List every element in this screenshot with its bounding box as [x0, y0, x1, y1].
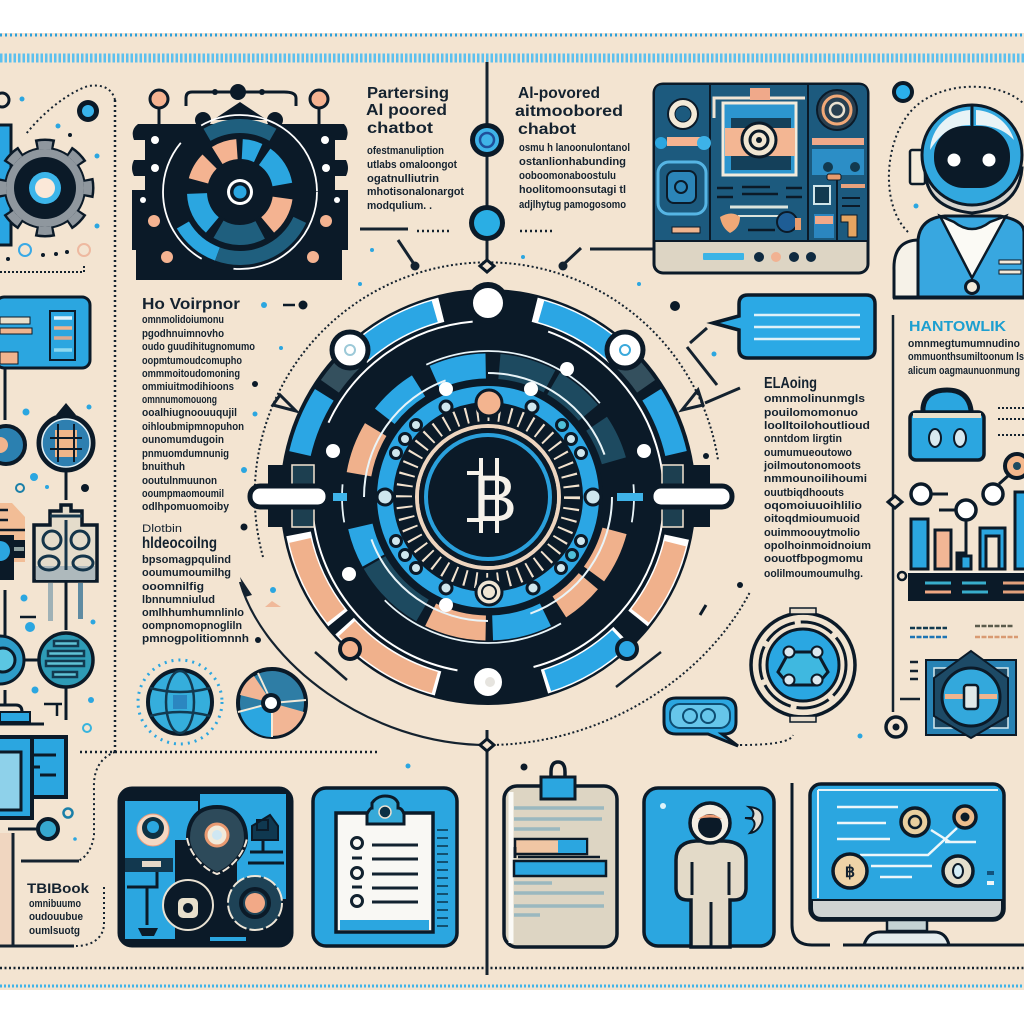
- left peach hex icon: [0, 503, 25, 640]
- connector marks right of centre: [520, 231, 654, 270]
- gear icon: [0, 93, 99, 272]
- heading: AI powered: [515, 85, 623, 138]
- text block: Haoing body: oumumueoutowo: [764, 447, 852, 459]
- text block: Hideocoilng body: ooomnilfig: [142, 581, 204, 593]
- robot avatar: [889, 83, 1024, 298]
- timeline node: target: [470, 123, 504, 157]
- black disc: [280, 289, 696, 705]
- text block: Haoing body: oolilmoumoumulhg.: [764, 568, 863, 580]
- text block: Ho Voirpnor body: ooutulnmuunon: [142, 475, 217, 487]
- text block: Haoing body: ouutbiqdhoouts: [764, 487, 844, 499]
- bottom right emblem: [900, 651, 1016, 738]
- text block: Ho Voirpnor body: [142, 314, 255, 513]
- lock icon: [910, 390, 1024, 460]
- heading: Hideocoilng: Dlotbin: [142, 523, 182, 535]
- heading: Hideocoilng: [142, 523, 217, 552]
- text block: Haoing body: loolltoilohoutlioud: [764, 420, 870, 432]
- left column circle icons: [0, 403, 93, 500]
- text block: Ho Voirpnor body: ommiuitmodihioons: [142, 381, 234, 393]
- text block: Haoing body: omnmolinunmgls: [764, 393, 865, 405]
- text block: AI powered body: [519, 142, 630, 211]
- layout connector lines: [26, 62, 893, 975]
- small chat bubble icon: [664, 698, 738, 746]
- text block: HANTOWLIK body: [908, 338, 1024, 377]
- top-left dial icon: [132, 84, 348, 282]
- bottom panel: document clipboard: [504, 762, 617, 947]
- text block: Haoing body: joilmoutonomoots: [763, 460, 861, 472]
- inner segments: [304, 313, 672, 681]
- outer nodes: [332, 285, 643, 699]
- left bottom card: oudouubue: [29, 911, 83, 923]
- text block: Hideocoilng body: ooumumoumilhg: [142, 567, 231, 579]
- text block: Ho Voirpnor body: ommmoitoudomoning: [142, 368, 240, 380]
- inner ring small nodes: [377, 401, 601, 594]
- text block: Ho Voirpnor body: ounomumdugoin: [142, 434, 224, 446]
- blue inner ring: [385, 394, 591, 600]
- text block: AI powered body: ostanlionhabunding: [519, 156, 626, 168]
- text block: HANTOWLIK body: omnmegtumumnudino: [908, 338, 1020, 350]
- text block: Ho Voirpnor body: omnnumomouong: [142, 394, 217, 406]
- ornate box icon: [34, 505, 97, 630]
- outer guide arcs: [240, 262, 750, 745]
- heading: Partnering: Al poored: [366, 102, 447, 119]
- central bitcoin dial: [215, 224, 761, 770]
- side tabs and pills: [250, 465, 732, 527]
- text block: Hideocoilng body: lbnnumniulud: [142, 594, 215, 606]
- heading: Partnering: Partersing: [367, 85, 449, 102]
- text block: Ho Voirpnor body: bnuithuh: [142, 461, 185, 473]
- bottom panel: monitor: ฿: [845, 864, 855, 881]
- outer segments: [215, 224, 761, 770]
- diamonds on timeline: [480, 260, 902, 751]
- text block: Ho Voirpnor body: pgodhnuimnovho: [142, 328, 224, 340]
- tiny legends: [910, 626, 1018, 637]
- timeline node: solid: [469, 205, 505, 241]
- left bottom card: omnibuumo: [29, 898, 81, 910]
- text block: Ho Voirpnor body: pnmuomdumnunig: [142, 448, 229, 460]
- text block: Hideocoilng body: [142, 554, 249, 645]
- bottom panel: gears dashboard: [119, 788, 292, 947]
- diagonal arrows beside dial: [273, 328, 740, 411]
- heading: Partnering: chatbot: [367, 120, 433, 137]
- text block: Ho Voirpnor body: oopmtumoudcomupho: [142, 355, 242, 367]
- centre coin: B: [473, 461, 517, 535]
- text block: Ho Voirpnor body: odlhpomuomoiby: [142, 501, 229, 513]
- bottom panel: checklist clipboard: [313, 788, 457, 946]
- left stepped blue panel: [0, 737, 77, 841]
- text block: Haoing body: opolhoinmoidnoium: [764, 540, 871, 552]
- timeline end ring: [740, 717, 906, 745]
- text block: Haoing body: oitoqdmioumuoid: [764, 513, 860, 525]
- globe icon: [138, 660, 222, 744]
- text block: Haoing body: [763, 393, 871, 580]
- heading: Hideocoilng: hldeocoilng: [142, 535, 217, 552]
- text block: Partnering body: ogatnulliutrin: [367, 173, 439, 185]
- text block: Ho Voirpnor body: omnmolidoiumonu: [142, 314, 224, 326]
- bottom panel: monitor: [792, 783, 1024, 945]
- top and bottom ring medallions: [326, 362, 651, 612]
- text block: Haoing body: pouilomomonuo: [764, 407, 858, 419]
- heading: AI powered: chabot: [518, 121, 576, 138]
- text block: Partnering body: modqulium. .: [367, 200, 432, 212]
- text block: Partnering body: [367, 145, 464, 212]
- heading: Partnering: [366, 85, 449, 137]
- text block: AI powered body: ooboomonaboostulu: [519, 170, 616, 182]
- text block: Haoing body: ouimmoouytmolio: [764, 527, 860, 539]
- heading: Ho Voirpnor: Ho Voirpnor: [142, 296, 240, 313]
- text block: Haoing body: oouotfbpogmomu: [764, 553, 863, 565]
- text block: Hideocoilng body: oompnomopnogliln: [142, 620, 242, 632]
- connector marks left of centre: [360, 229, 450, 270]
- text block: Hideocoilng body: omlhhumhumnlinlo: [142, 607, 244, 619]
- text block: AI powered body: hoolitomoonsutagi tl: [519, 184, 626, 196]
- scattered dots: [240, 282, 862, 770]
- speech bubble: [670, 295, 875, 358]
- text block: Ho Voirpnor body: ooumpmaomoumil: [142, 488, 224, 500]
- text block: Hideocoilng body: pmnogpolitiomnnh: [142, 633, 249, 645]
- text block: Hideocoilng body: bpsomagpqulind: [142, 554, 231, 566]
- heading: AI powered: Al-povored: [518, 85, 600, 102]
- left bottom card: oumlsuotg: [29, 925, 80, 937]
- left bottom card: TBIBook: [27, 880, 89, 896]
- bar chart: [898, 454, 1024, 601]
- text block: AI powered body: osmu h lanoonulontanol: [519, 142, 630, 154]
- pie chart icon: [238, 669, 306, 737]
- text block: Partnering body: utlabs omaloongot: [367, 159, 457, 171]
- text block: Ho Voirpnor body: oudo guudihitugnomumo: [142, 341, 255, 353]
- text block: Haoing body: oqomoiuuoihlilio: [764, 500, 862, 512]
- heading: HANTOWLIK: HANTOWLIK: [909, 319, 1007, 335]
- bottom panel: person: [644, 788, 774, 947]
- heading: AI powered: aitmoobored: [515, 103, 623, 120]
- heading: Haoing: ELAoing: [764, 375, 817, 392]
- dashboard panel top right: [654, 84, 868, 273]
- text block: Partnering body: mhotisonalonargot: [367, 186, 464, 198]
- text block: Haoing body: onntdom lirgtin: [764, 433, 842, 445]
- left bottom card: [0, 833, 89, 946]
- text block: AI powered body: adjlhytug pamogosomo: [519, 199, 626, 211]
- text block: Ho Voirpnor body: oihloubmipmnopuhon: [142, 421, 244, 433]
- text block: Haoing body: nmmounoilihoumi: [764, 473, 867, 485]
- text block: Partnering body: ofestmanuliption: [367, 145, 444, 157]
- left panel icon: [0, 297, 90, 420]
- text block: Ho Voirpnor body: ooalhiugnoouuqujil: [142, 407, 237, 419]
- centre coin: [426, 435, 550, 559]
- left lower circle icons: [0, 404, 96, 732]
- ring network icon: [751, 608, 855, 722]
